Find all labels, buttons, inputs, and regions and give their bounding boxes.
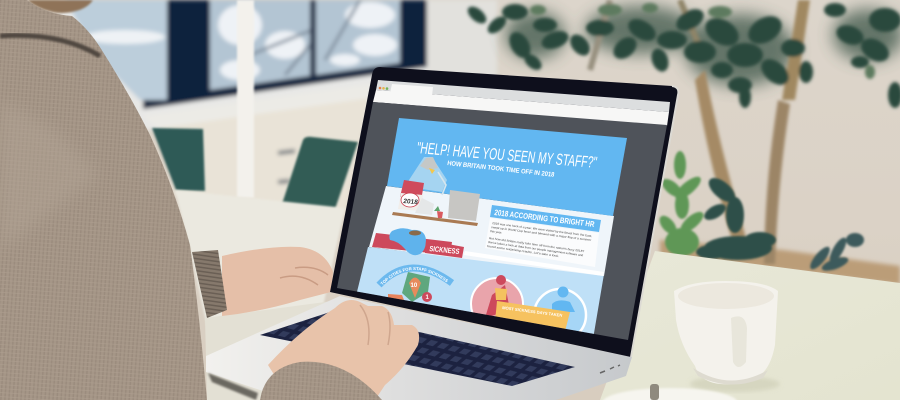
cup base [693,368,768,385]
finger creases [360,305,390,345]
panel text: We've taken a look at data from our people management software and [488,240,584,257]
panel text: found some surprising results. Let's take a look. [487,244,560,258]
callout: yellow banner [496,301,570,329]
icon: desk shelf [392,212,478,226]
fern leaves [656,151,707,256]
ribbon: sickness [372,228,464,258]
ribbon: sickness: SICKNESS [429,244,460,256]
icon: desk plant [434,206,443,218]
panel text: But how did Britain really take time off from the nation's busy 2018? [489,236,585,253]
browser window [373,80,670,126]
map of UK with pins: 10 [410,283,418,289]
keyboard [260,312,575,386]
background: lower desk surface [205,300,340,400]
window mullion [310,0,316,78]
sweater shading [0,100,100,250]
panel heading: 2018 ACCORDING TO BRIGHT HR [494,208,595,229]
icon: blue circle person [534,286,588,332]
icon: calendar 2018: 2018 [403,198,419,206]
background: chairs [152,128,358,209]
orange pin [388,294,404,300]
right chair [282,137,358,209]
panel text: swept up in World Cup fever and blessed with a major flop of a summer [491,225,592,242]
cup shadow [690,376,780,392]
person: sleeve cuff [192,250,227,318]
foliage canopy [465,3,900,108]
dark leaves [696,174,776,260]
silver lid edge [631,86,678,357]
arc heading: top cities for staff sickness: TOP CITIES FOR STAFF SICKNESS [380,267,448,285]
background: wood floor strip [660,240,900,285]
saucer [602,388,738,400]
icon: pink circle person [470,275,524,316]
saucer and pen [602,384,738,400]
desk surface right [600,251,900,400]
panel: 2018 according to Bright HR [485,205,601,267]
window left pane [65,0,167,100]
sickness label [425,240,464,258]
icon: laptop on shelf [448,190,480,221]
background: foliage shade mass [505,6,900,86]
finger creases [280,267,328,285]
shadow below base [208,373,258,400]
window snow patches [218,2,397,80]
trees outside the window [250,0,360,75]
person: sweater back [0,0,207,400]
icon: desk lamp [408,157,447,195]
person: left hand [222,247,333,316]
sweater body [0,0,207,400]
window right pane [210,0,400,90]
pale blue section [357,247,604,334]
collar stripe [0,35,100,56]
blue header [387,118,627,216]
laptop lid bezel [330,67,678,357]
person: right hand on keyboard [268,300,419,400]
side ports [600,365,620,373]
background: small green plant [656,151,864,273]
browser page [337,102,667,340]
far right sprig [807,233,864,273]
browser address bar [373,90,669,126]
white divider stripe [464,251,604,276]
icon: hot water bottle blob [389,228,426,255]
tree trunks [695,70,748,250]
callout: yellow banner: MOST SICKNESS DAYS TAKEN [502,305,563,318]
panel text: 2018 was one heck of a year. We were visited by the Beast from the East, [492,221,593,238]
browser tab bar [376,80,670,112]
background: sill and cabinet [143,84,372,215]
panel text: this year. [490,229,503,235]
active tab [390,84,433,96]
cup handle [731,316,747,367]
icon: calendar 2018 [398,180,424,211]
window buttons [379,87,388,90]
icon: white paper stack [415,198,434,215]
white section [369,186,614,276]
infographic on screen [357,118,627,334]
person: right sleeve [260,362,382,400]
cup body [674,281,778,384]
pen [650,384,659,400]
map of UK with pins: 1 [426,295,430,301]
background: office window [60,0,497,130]
background: plant with foliage [465,0,900,264]
map pin 10 [409,278,421,298]
panel heading bar [490,205,601,232]
panel body [485,218,599,267]
heading: infographic title: "HELP! HAVE YOU SEEN MY STAFF?" [415,139,599,172]
subtitle: HOW BRITAIN TOOK TIME OFF IN 2018 [447,160,555,179]
coffee cup [674,281,780,392]
map of UK with pins [388,272,432,302]
background: white pole [237,0,254,198]
window frame [143,0,427,109]
background: far desk surface [175,190,345,340]
laptop base [206,296,632,400]
map pin 1 [422,292,432,302]
panel text [487,221,593,258]
head and neck [27,0,93,13]
laptop [206,67,680,400]
cup interior [678,283,774,309]
left chair [152,128,205,191]
